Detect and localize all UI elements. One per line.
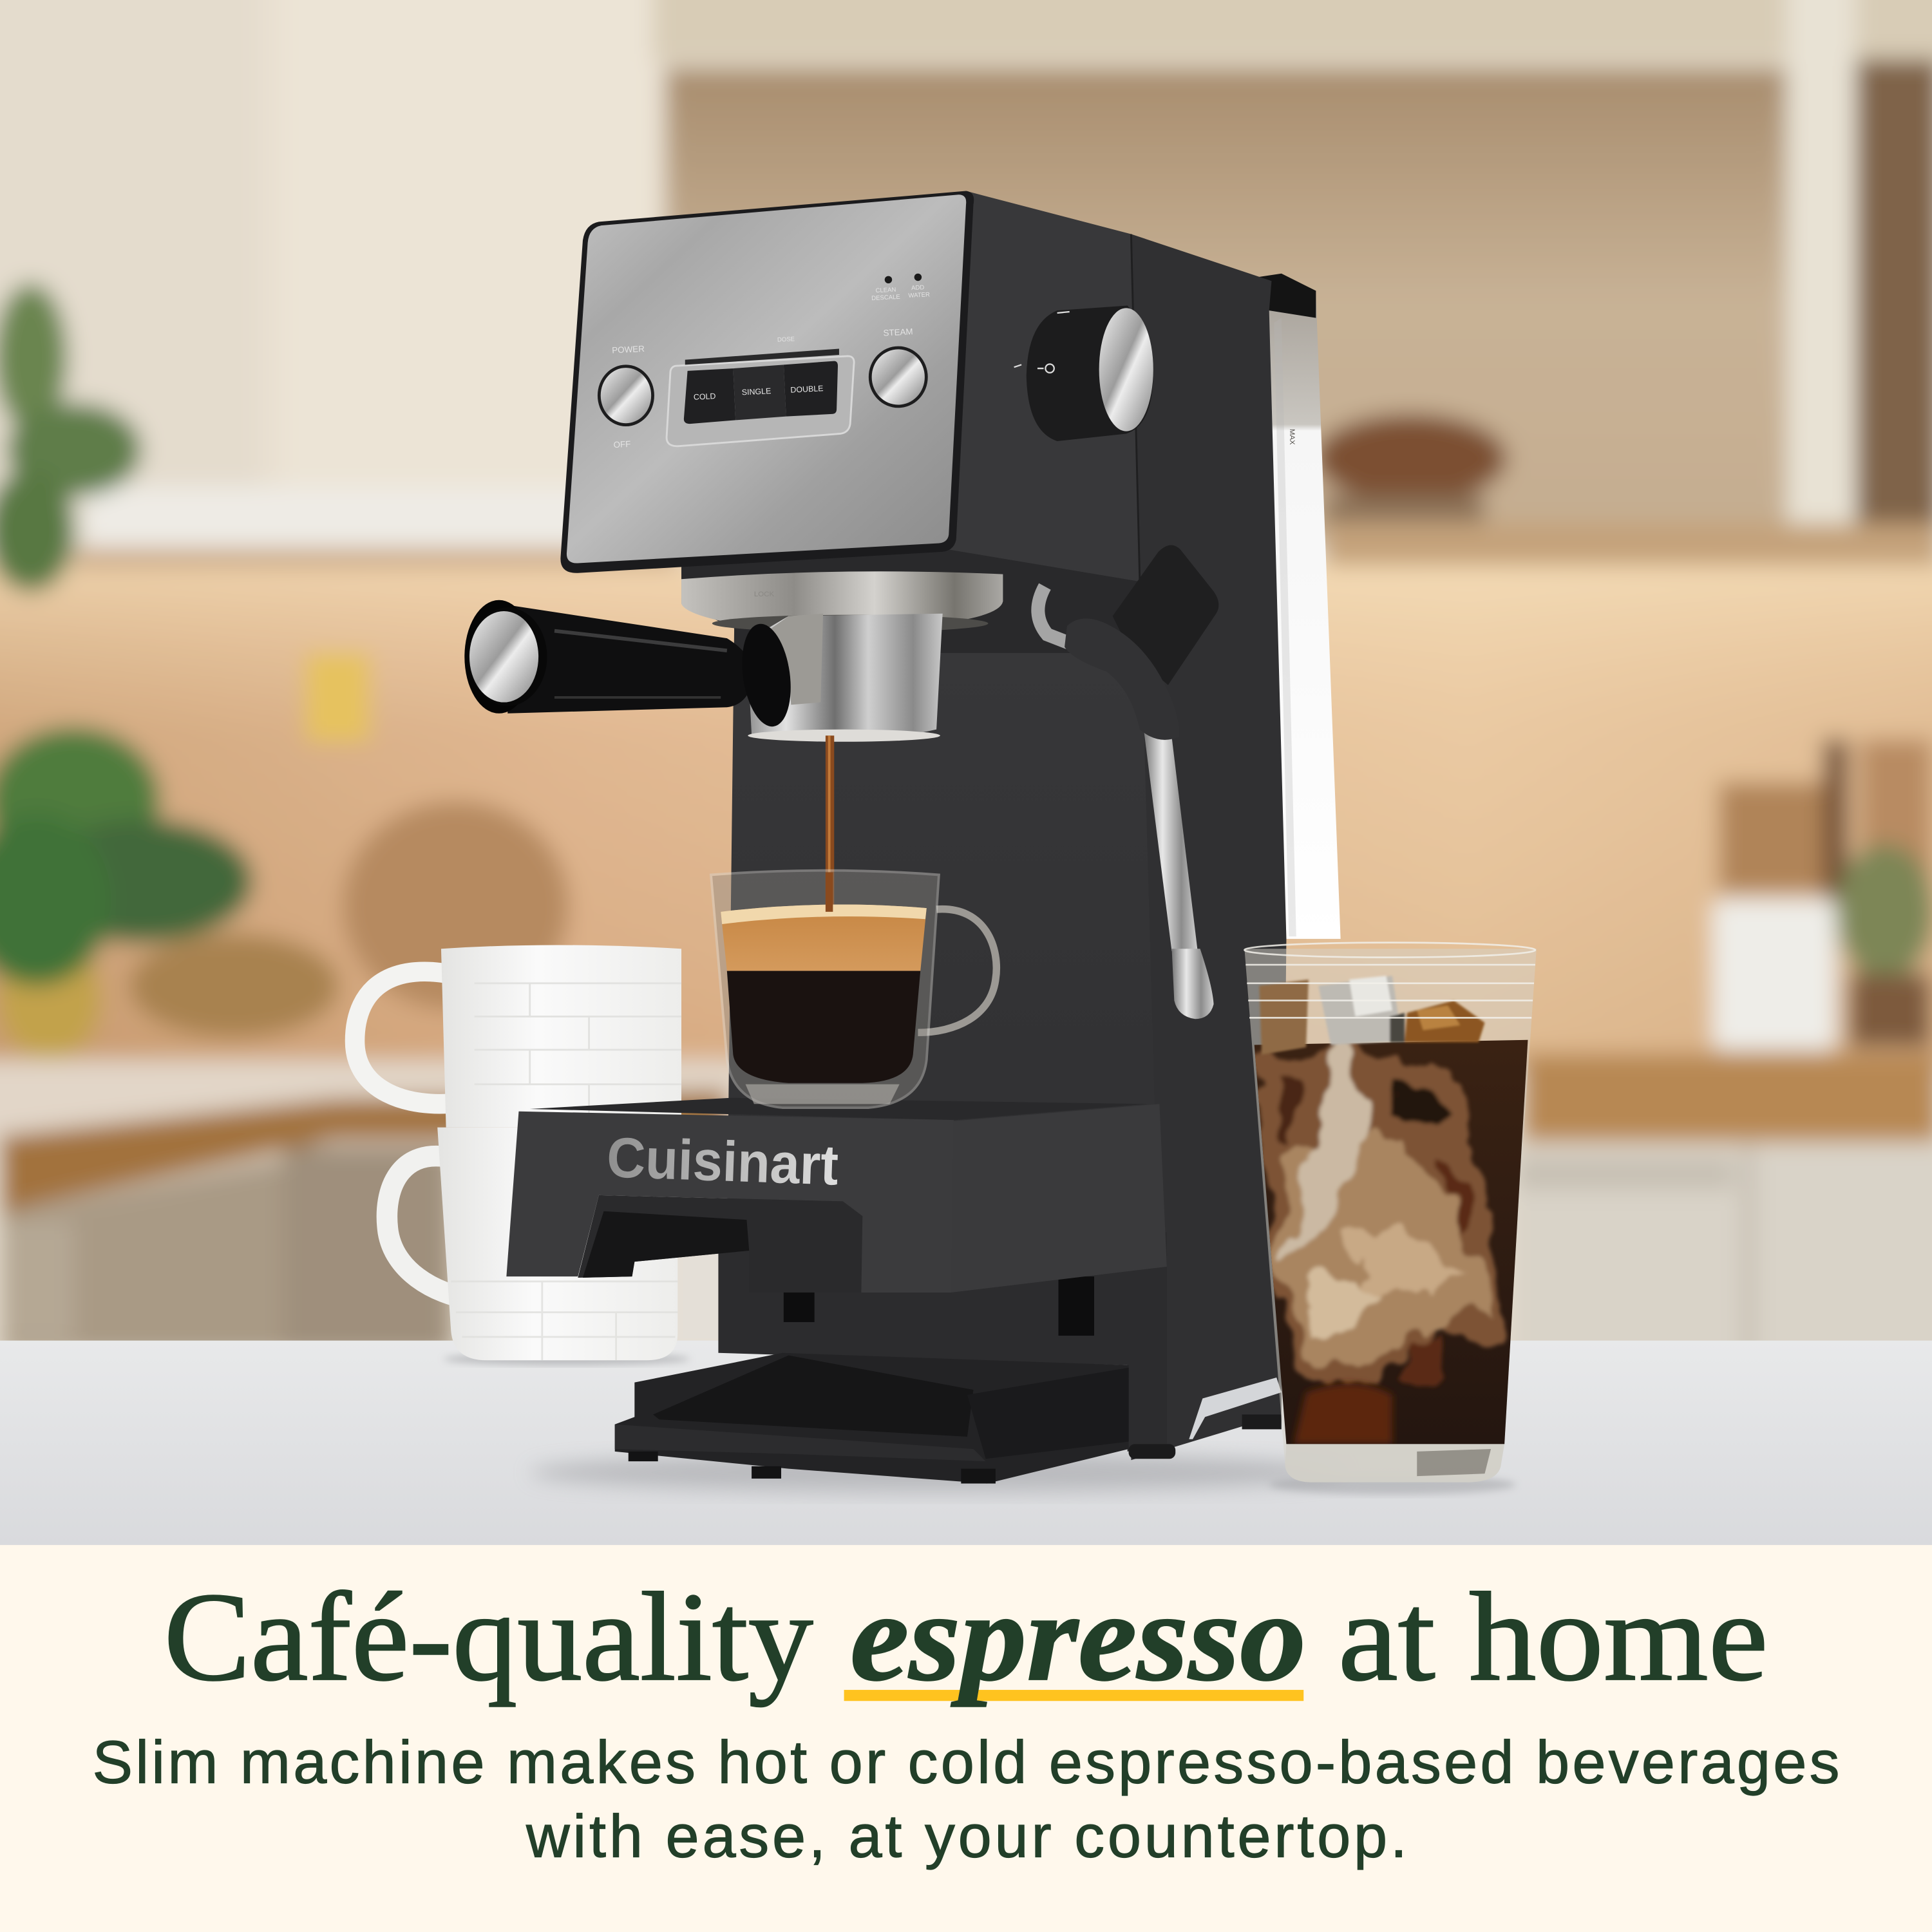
steam button xyxy=(869,346,928,408)
drip block right face xyxy=(951,1104,1167,1293)
dose buttons: COLD xyxy=(694,392,716,402)
iced coffee glass xyxy=(1244,943,1537,1482)
rear feet xyxy=(1129,1414,1282,1459)
espresso stream xyxy=(826,735,834,905)
panel labels: OFF xyxy=(613,439,631,450)
column front xyxy=(727,579,1158,1232)
dose buttons xyxy=(684,361,838,424)
head side xyxy=(949,191,1140,582)
foreground counter xyxy=(0,1341,1932,1545)
control panel xyxy=(598,274,930,450)
counter shadow xyxy=(444,1353,1515,1495)
heading: Café-quality xyxy=(164,1566,813,1707)
drip block notch xyxy=(578,1195,862,1293)
crema xyxy=(721,905,927,971)
water slots xyxy=(784,1267,1094,1336)
power button xyxy=(598,365,654,426)
milk swirl xyxy=(1257,1047,1501,1394)
steam wand xyxy=(1038,545,1218,1019)
panel labels: STEAM xyxy=(883,327,913,338)
panel labels: POWER xyxy=(612,344,645,355)
head outline and metal faceplate xyxy=(560,191,974,573)
subheading xyxy=(92,1728,1840,1870)
panel labels: DOSE xyxy=(777,336,795,344)
espresso machine xyxy=(464,191,1341,1484)
panel labels: WATER xyxy=(908,291,930,299)
cuisinart logo: Cuisinart xyxy=(606,1125,840,1197)
portafilter handle xyxy=(464,600,797,730)
indicator lights xyxy=(885,274,922,283)
panel labels: ADD xyxy=(911,284,925,292)
blurred kitchen background xyxy=(0,0,1932,1545)
highlight underline xyxy=(844,1690,1303,1701)
glass espresso cup xyxy=(711,871,996,1108)
dose buttons: DOUBLE xyxy=(790,384,824,395)
portafilter basket xyxy=(746,614,943,742)
subheading: with ease, at your countertop. xyxy=(526,1802,1407,1870)
chrome base strip xyxy=(1189,1378,1282,1439)
glass base xyxy=(1285,1444,1504,1482)
group head ring: LOCK xyxy=(754,591,774,598)
heading: espresso xyxy=(850,1566,1306,1707)
head underside xyxy=(681,547,1140,653)
white stacked mugs xyxy=(355,945,681,1360)
water reservoir xyxy=(1257,274,1341,939)
heading xyxy=(164,1566,1768,1707)
water reservoir: MAX xyxy=(1288,429,1296,445)
ice cubes xyxy=(1259,976,1484,1055)
column side xyxy=(1131,234,1286,1460)
glass rim and lines xyxy=(1244,943,1535,1018)
panel labels: CLEAN xyxy=(875,287,896,294)
dose buttons: SINGLE xyxy=(741,386,772,397)
column lower front xyxy=(718,1232,1167,1452)
panel labels: DESCALE xyxy=(871,294,900,302)
coffee liquid xyxy=(1255,1040,1528,1444)
button bezel xyxy=(667,356,854,446)
panel labels xyxy=(612,284,930,450)
subheading: Slim machine makes hot or cold espresso-based beverages xyxy=(92,1728,1840,1795)
group head ring xyxy=(681,571,1003,632)
drip tray top plate xyxy=(530,1098,1147,1120)
caption panel xyxy=(0,1545,1932,1932)
drip tray xyxy=(615,1353,1129,1484)
espresso xyxy=(727,971,920,1083)
selector knob xyxy=(1014,305,1153,441)
heading: at home xyxy=(1338,1566,1768,1707)
drip block front face xyxy=(506,1112,954,1293)
